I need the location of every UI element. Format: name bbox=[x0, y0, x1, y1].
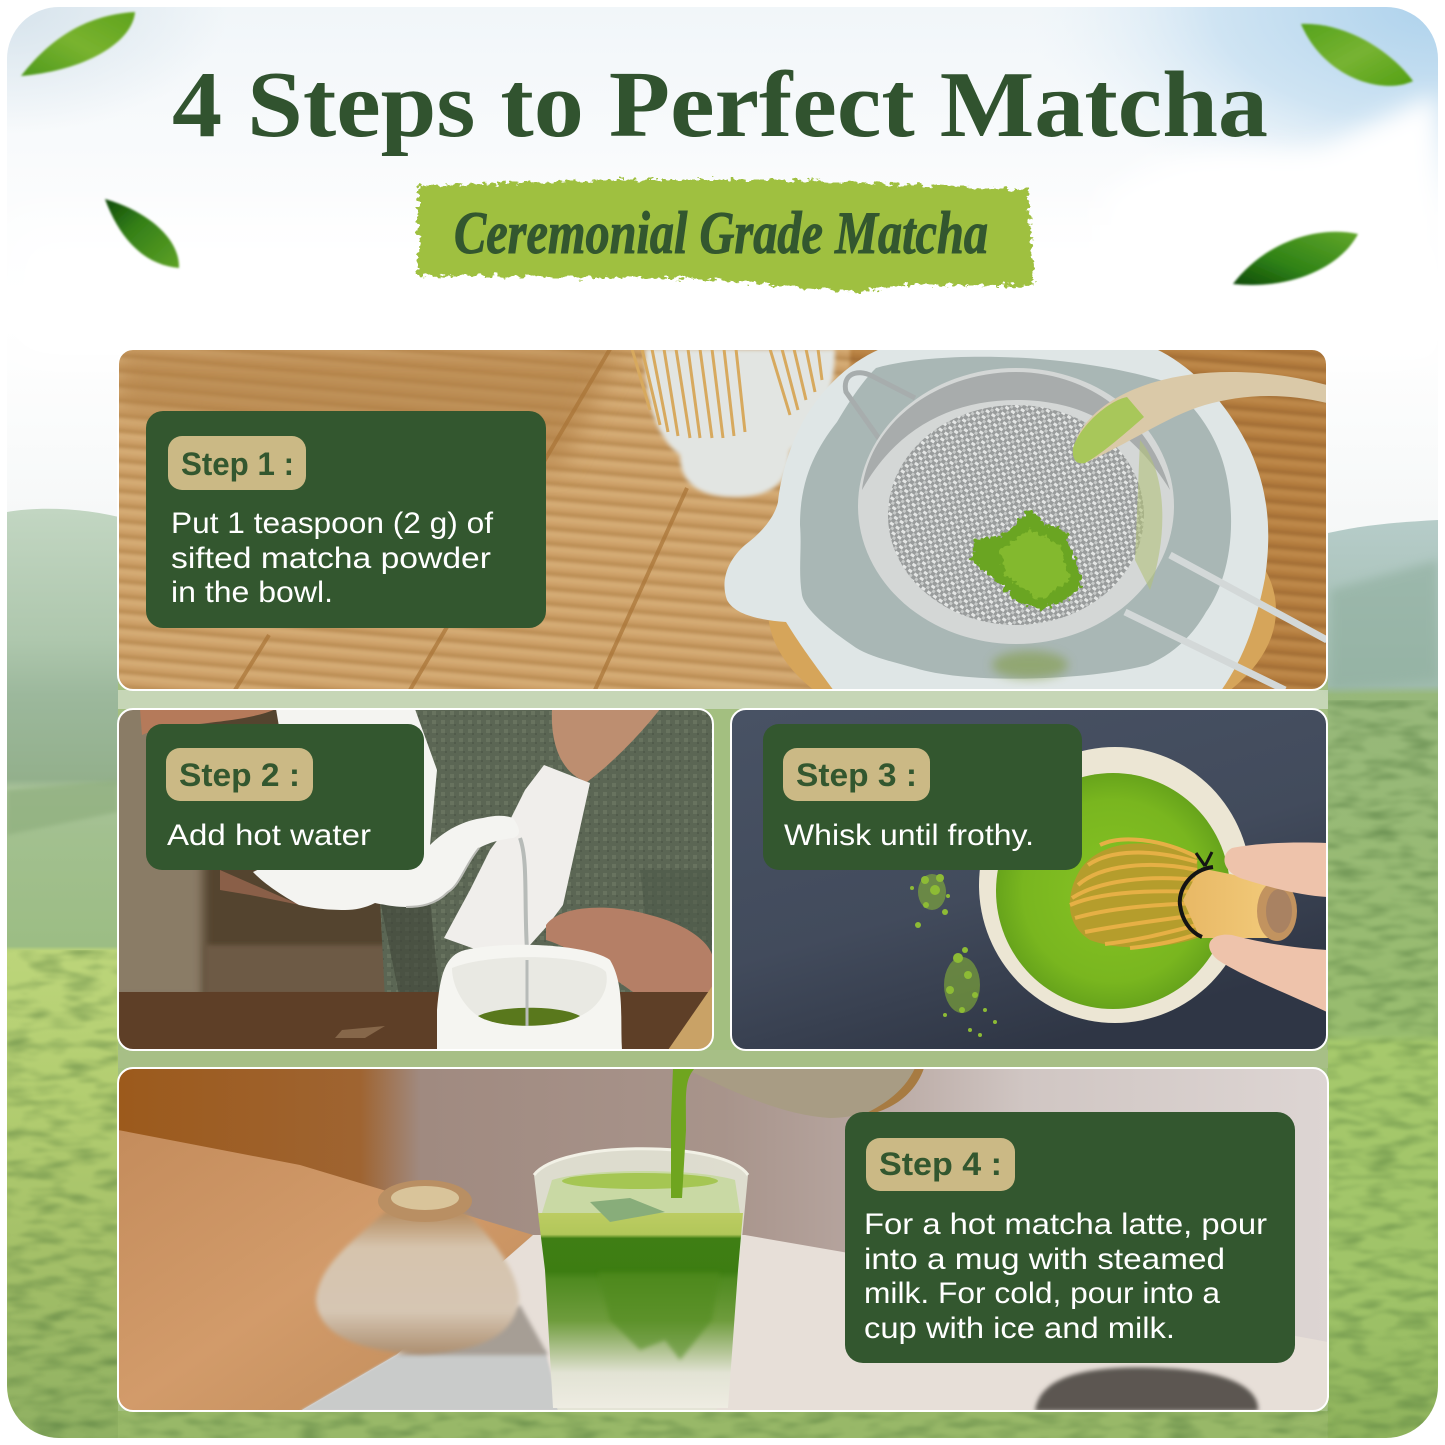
bowl bbox=[979, 747, 1251, 1023]
matcha specks bbox=[910, 874, 997, 1037]
strainer bbox=[845, 368, 1327, 690]
shirt bbox=[380, 709, 713, 1000]
panel: step 2 bbox=[108, 700, 713, 1050]
step 1 badge bbox=[168, 436, 306, 490]
step 4 instruction: into a mug with steamed bbox=[864, 1243, 1225, 1276]
icon: leaf top left bbox=[21, 12, 135, 76]
step 3 badge bbox=[783, 748, 930, 801]
subtitle banner bbox=[418, 180, 1034, 292]
step 4 instruction: For a hot matcha latte, pour bbox=[864, 1208, 1267, 1241]
photo: matcha latte bbox=[118, 1068, 1328, 1411]
panel: step 4 bbox=[118, 1068, 1328, 1411]
step 1 text box bbox=[146, 411, 546, 628]
white bowl bbox=[724, 349, 1268, 695]
icon: leaf right bbox=[1233, 232, 1358, 285]
wooden table bbox=[118, 1130, 533, 1411]
water stream bbox=[518, 838, 529, 945]
spoon bbox=[1075, 372, 1327, 463]
sky bbox=[7, 7, 1438, 533]
step 1 badge: Step 1 : bbox=[181, 446, 294, 482]
step 4 instruction: milk. For cold, pour into a bbox=[864, 1277, 1220, 1310]
tea cup bbox=[437, 945, 622, 1050]
step 2 badge bbox=[166, 748, 313, 801]
t-shirt bbox=[444, 765, 590, 958]
step 3 instruction: Whisk until frothy. bbox=[784, 819, 1034, 852]
step 2 text box bbox=[146, 724, 424, 870]
step 1 instruction: sifted matcha powder bbox=[171, 542, 491, 575]
step 3 text box bbox=[763, 724, 1082, 870]
photo: pouring hot water bbox=[108, 700, 713, 1050]
pouring hand bbox=[140, 709, 276, 735]
glass bbox=[534, 1149, 748, 1411]
step 4 text box bbox=[845, 1112, 1295, 1363]
bamboo whisk bbox=[1070, 839, 1297, 948]
step 4 badge: Step 4 : bbox=[879, 1146, 1002, 1182]
step 1 instruction: Put 1 teaspoon (2 g) of bbox=[171, 507, 494, 540]
subtitle text: Ceremonial Grade Matcha bbox=[454, 200, 988, 266]
step 1 instruction: in the bowl. bbox=[171, 576, 333, 609]
ceramic vase bbox=[316, 1180, 519, 1354]
whisk cup bbox=[632, 349, 835, 497]
step 1 instruction bbox=[171, 507, 494, 609]
icon: leaf top right bbox=[1301, 24, 1413, 86]
pour stream bbox=[671, 1068, 695, 1198]
table bbox=[118, 992, 713, 1050]
white cloth bbox=[300, 1235, 1328, 1411]
step 4 instruction: cup with ice and milk. bbox=[864, 1312, 1175, 1345]
step 2 badge: Step 2 : bbox=[179, 757, 300, 793]
teapot bbox=[253, 709, 519, 910]
hills and tea fields bbox=[7, 509, 1438, 1445]
neck bbox=[552, 709, 660, 782]
hand bbox=[1209, 843, 1327, 1012]
step 4 badge bbox=[866, 1138, 1015, 1191]
pitcher bbox=[692, 1068, 924, 1118]
icon: leaf left bbox=[105, 199, 179, 268]
step 3 badge: Step 3 : bbox=[796, 757, 917, 793]
photo: whisking matcha bbox=[731, 709, 1327, 1050]
panel: step 1 bbox=[117, 350, 1328, 691]
step 4 instruction bbox=[864, 1208, 1267, 1345]
title: 4 Steps to Perfect Matcha bbox=[172, 53, 1268, 157]
matcha powder bbox=[972, 508, 1083, 610]
resting hand bbox=[546, 908, 712, 992]
brush stroke bbox=[418, 180, 1034, 292]
photo: sieving matcha bbox=[119, 350, 1326, 689]
tray bbox=[769, 572, 1276, 689]
step 2 instruction: Add hot water bbox=[167, 819, 371, 852]
panel: step 3 bbox=[731, 709, 1327, 1050]
bamboo whisk bbox=[668, 985, 713, 1050]
